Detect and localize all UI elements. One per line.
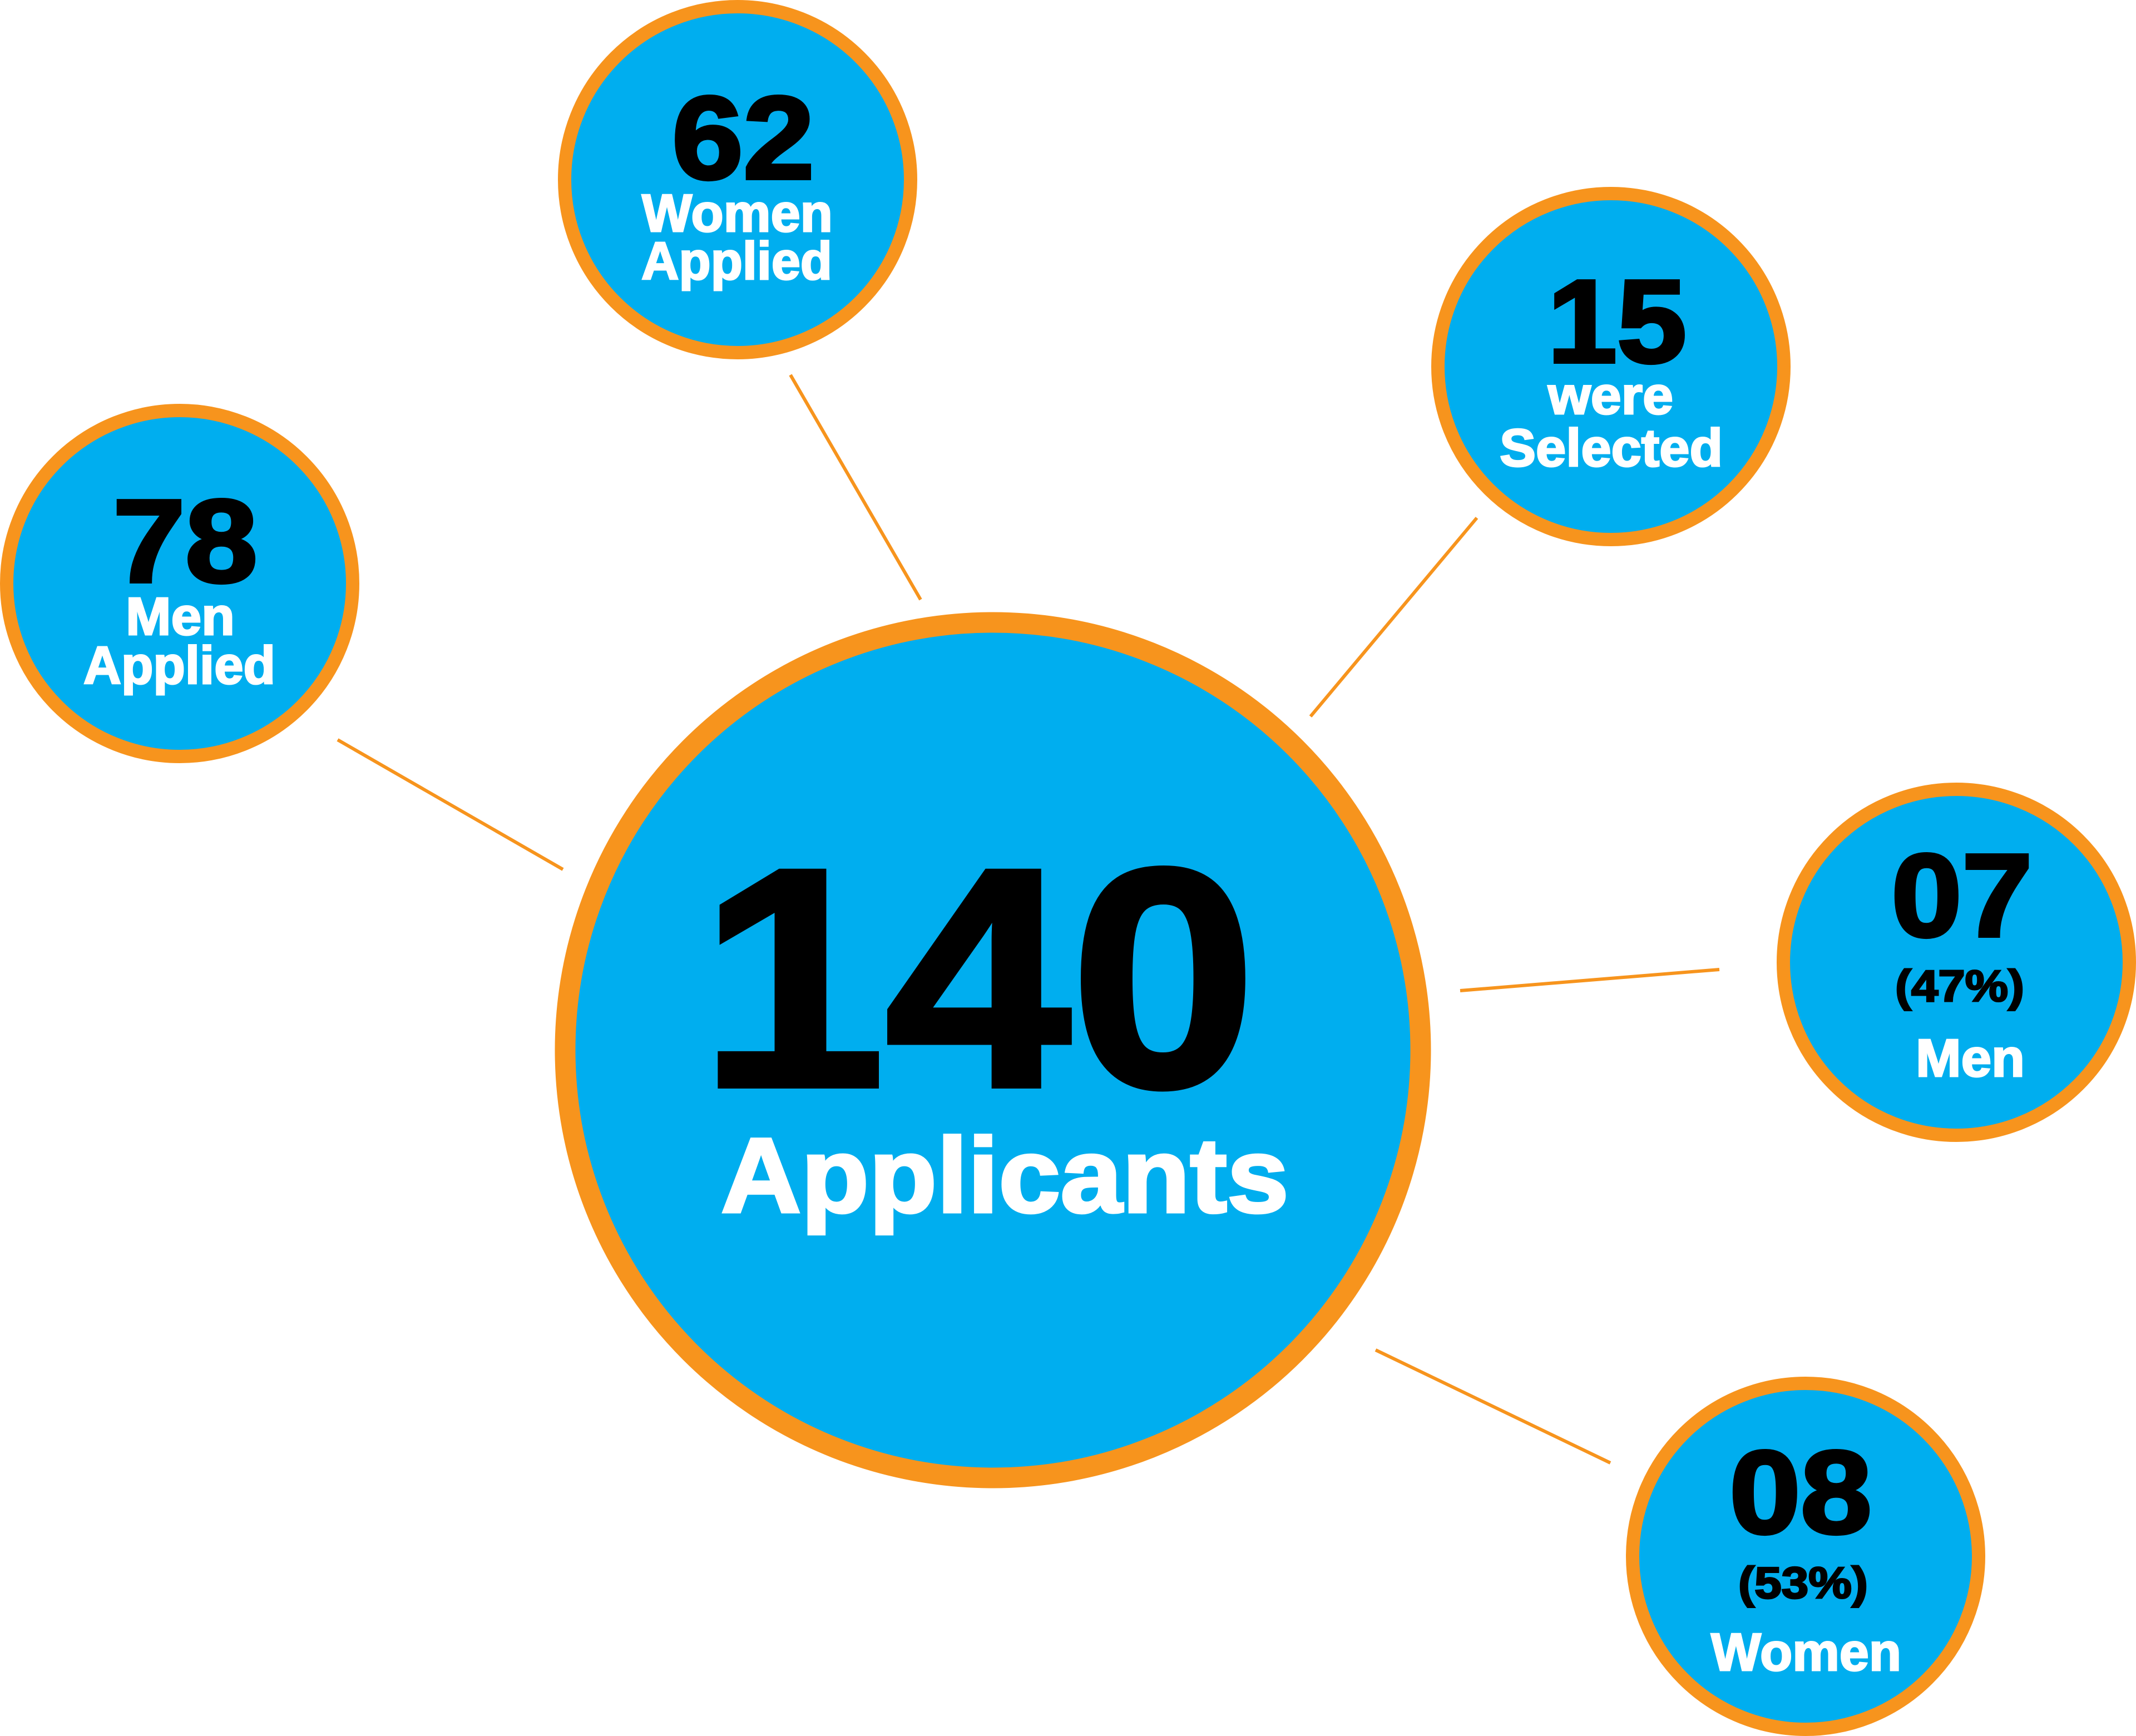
panel: 78 men applied [7, 410, 353, 756]
label: Women Applied: Women [642, 184, 833, 243]
connector: selected [1311, 518, 1477, 716]
number: 07: 07 [1891, 829, 2033, 961]
percentage: 47%: (47%) [1895, 961, 2024, 1011]
label: were Selected [1500, 366, 1723, 478]
label: Women Applied: Applied [641, 231, 832, 291]
panel: 140 applicants [565, 622, 1421, 1478]
connector: men applied [338, 740, 563, 869]
connector: selected women [1376, 1350, 1610, 1463]
label: Men: Men [1916, 1028, 2025, 1088]
number: 78: 78 [113, 475, 258, 607]
number: 62: 62 [672, 72, 814, 204]
label: Women: Women [1711, 1623, 1901, 1682]
connector: selected men [1460, 970, 1719, 991]
panel: 08 (53%) women [1633, 1383, 1979, 1729]
label: Women Applied [641, 184, 833, 291]
label: were Selected: were [1547, 366, 1673, 426]
connector: women applied [790, 375, 921, 600]
panel: 15 were selected [1438, 194, 1784, 540]
panel: 62 women applied [565, 7, 911, 353]
label: Applicants: Applicants [721, 1116, 1289, 1235]
label: Men Applied: Men [126, 587, 235, 646]
number: 08: 08 [1729, 1426, 1872, 1558]
label: Men Applied [83, 587, 275, 695]
label: were Selected: Selected [1500, 418, 1723, 478]
panel: 07 (47%) men [1783, 789, 2129, 1135]
percentage: 53%: (53%) [1738, 1558, 1868, 1608]
label: Men Applied: Applied [83, 636, 275, 695]
number: 140: 140 [700, 804, 1256, 1152]
number: 15: 15 [1547, 255, 1687, 387]
